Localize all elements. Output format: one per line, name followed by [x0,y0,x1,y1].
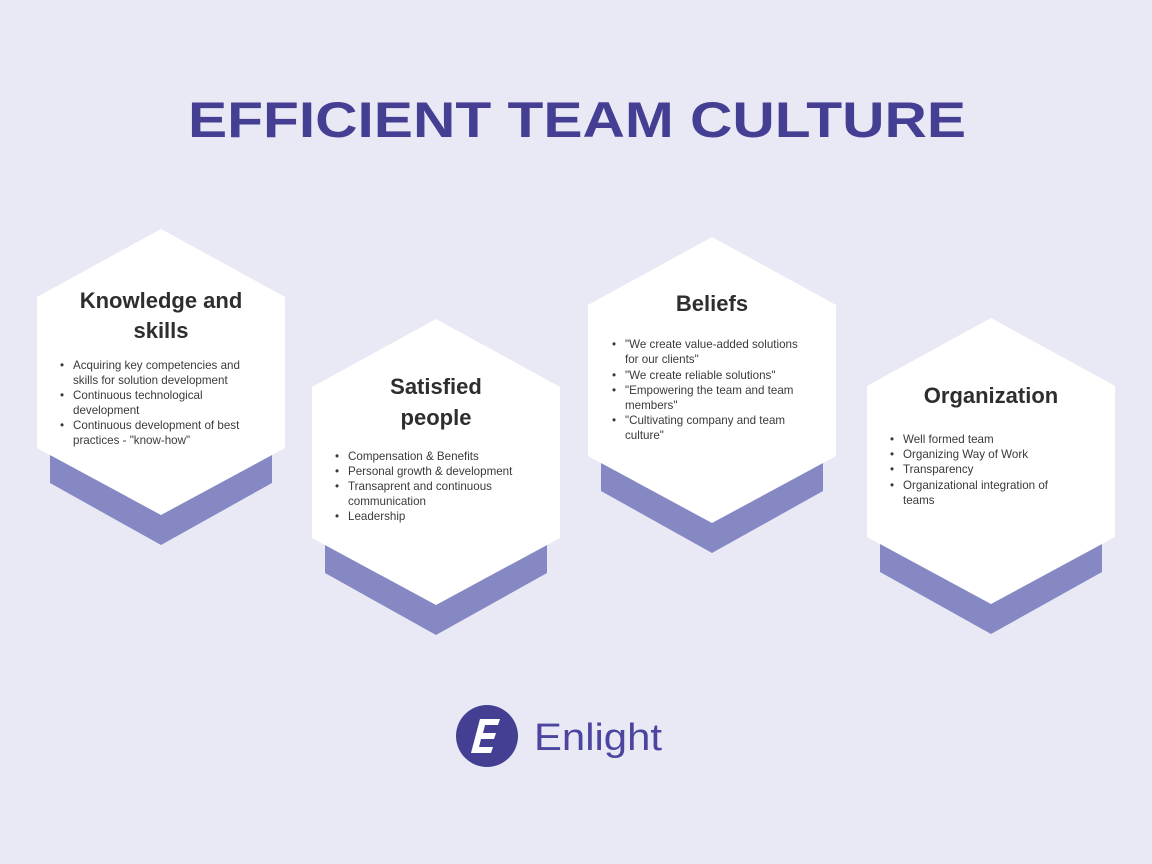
bullets: satisfied people: Personal growth & development [348,465,513,478]
bullets: knowledge: practices - "know-how" [73,434,190,447]
bullets: knowledge: Continuous development of best [73,419,240,432]
bullets: beliefs: • [612,384,616,397]
bullets: organization: • [890,433,894,446]
bullets: beliefs: "We create value-added solutions [625,338,798,351]
bullets: knowledge: Acquiring key competencies and [73,359,240,372]
bullets: organization: Organizing Way of Work [903,448,1028,461]
panel: knowledge and skills [37,229,285,545]
panel: beliefs [588,237,836,553]
logo: Enlight [456,705,662,767]
icon: E circle [456,705,518,767]
bullets: beliefs: • [612,338,616,351]
bullets: satisfied people: Leadership [348,510,405,523]
title: EFFICIENT TEAM CULTURE [188,92,966,148]
bullets: beliefs: culture" [625,429,664,442]
bullets: satisfied people: communication [348,495,426,508]
bullets: beliefs: members" [625,399,677,412]
heading: satisfied people: people [401,405,471,430]
bullets: beliefs: • [612,369,616,382]
bullets: satisfied people: • [335,465,339,478]
bullets: knowledge: • [60,359,64,372]
bullets: organization: • [890,463,894,476]
bullets: organization: Well formed team [903,433,994,446]
bullets: organization: Organizational integration of [903,479,1049,492]
bullets: knowledge: skills for solution development [73,374,228,387]
heading: knowledge and skills: skills [133,318,189,343]
bullets: knowledge: Continuous technological [73,389,203,402]
heading: beliefs: Beliefs [676,291,748,316]
bullets: satisfied people: • [335,510,339,523]
bullets: beliefs: for our clients" [625,353,699,366]
panel: satisfied people [312,319,560,635]
bullets: knowledge: • [60,419,64,432]
brand name: Enlight [534,717,662,759]
bullets: beliefs: "Cultivating company and team [625,414,785,427]
bullets: organization: • [890,448,894,461]
bullets: organization: Transparency [903,463,974,476]
bullets: satisfied people: • [335,480,339,493]
bullets: knowledge: development [73,404,140,417]
heading: knowledge and skills: Knowledge and [80,288,242,313]
bullets: knowledge: • [60,389,64,402]
bullets: beliefs: "Empowering the team and team [625,384,793,397]
bullets: organization: teams [903,494,935,507]
bullets: beliefs: "We create reliable solutions" [625,369,775,382]
heading: organization: Organization [924,383,1058,408]
bullets: satisfied people: Compensation & Benefits [348,450,479,463]
heading: satisfied people: Satisfied [390,374,482,399]
bullets: beliefs: • [612,414,616,427]
bullets: satisfied people: Transaprent and continuous [348,480,492,493]
bullets: satisfied people: • [335,450,339,463]
bullets: organization: • [890,479,894,492]
panel: organization [867,318,1115,634]
